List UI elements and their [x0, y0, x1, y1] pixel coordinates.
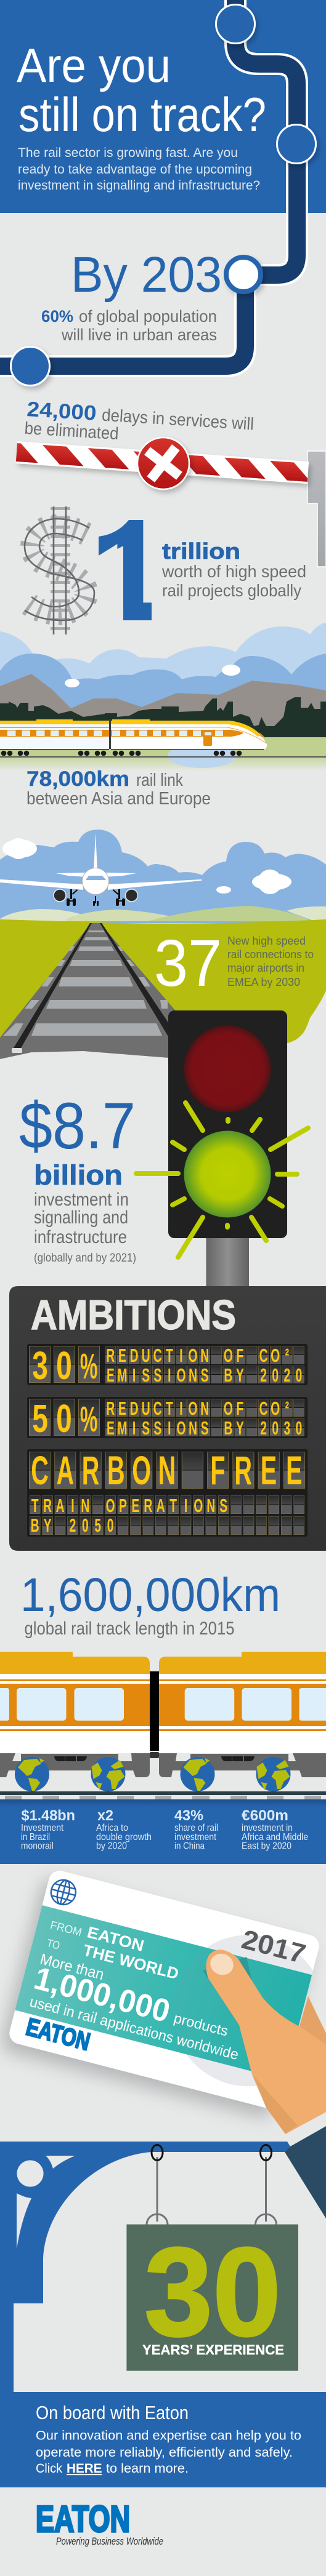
- rail: [0, 1791, 326, 1795]
- text: products count: [26, 1950, 251, 2063]
- olive field: [0, 919, 326, 1046]
- stat: middle east: Africa and Middle: [242, 1832, 308, 1842]
- board row: carbon free: CARBON FREE: [31, 1448, 303, 1494]
- heading: by 2030: By 203: [71, 247, 222, 303]
- icon: globe wheel: [91, 1757, 126, 1791]
- trillion text: [161, 538, 306, 600]
- rail link text: 78,000km: [26, 767, 129, 791]
- icon: hand holding card: [206, 1950, 326, 2134]
- coupling: [150, 1671, 159, 1758]
- stat: africa: x2: [97, 1807, 113, 1824]
- stat: middle east: [242, 1807, 308, 1851]
- icon: dollar sign made of rail tracks: [25, 506, 94, 634]
- stat: brazil: monorail: [21, 1841, 54, 1851]
- text: 8.7 billion investment: investment in: [34, 1190, 129, 1210]
- icon: level crossing barrier: [16, 435, 309, 492]
- panel: blue frame with track arch: [0, 2142, 326, 2487]
- left carriage: [0, 1652, 150, 1777]
- board row: 50 percent: 50: [32, 1397, 72, 1441]
- delays text: 24,000: [26, 398, 97, 425]
- on board text: HERE: [67, 2461, 102, 2476]
- traffic light: [136, 1010, 308, 1257]
- card shadow: [0, 1877, 314, 2119]
- text: 37 airports: major airports in: [227, 961, 304, 974]
- logo: eaton on card: EATON: [23, 2014, 93, 2056]
- board row: carbon free: TRAIN OPERATIONS: [31, 1496, 227, 1516]
- title: Are you: [17, 38, 171, 92]
- delays text: [24, 398, 255, 451]
- header panel: [0, 0, 326, 213]
- stat: china: investment: [174, 1832, 216, 1842]
- sign: 30 years experience: 30: [144, 2222, 281, 2362]
- logo: eaton footer: EATON: [36, 2498, 130, 2540]
- text: 37 airports: EMEA by 2030: [227, 975, 300, 988]
- on board text: Click: [36, 2461, 62, 2476]
- urban population text: will live in urban areas: [61, 326, 217, 344]
- panel: rail ticket card: [7, 1868, 326, 2116]
- stat: africa: Africa to: [96, 1823, 128, 1833]
- icon: globe wheel: [180, 1757, 214, 1791]
- text: 8.7 billion investment: signalling and: [34, 1207, 128, 1228]
- text: products count: 1,000,000: [30, 1961, 174, 2030]
- trillion text: rail projects globally: [162, 581, 301, 600]
- on board text: to learn more.: [106, 2461, 189, 2476]
- text: from eaton to the world: TO: [46, 1937, 61, 1952]
- panel: ambitions departure board: [9, 1286, 326, 1551]
- board row: 50 percent: %: [80, 1399, 97, 1439]
- stat: africa: double growth: [96, 1832, 152, 1842]
- stat: china: in China: [174, 1841, 205, 1851]
- landscape scene with high speed train: [0, 623, 326, 771]
- icon: globe: [48, 1878, 78, 1907]
- stat: middle east: East by 2020: [242, 1841, 291, 1851]
- text: products count: More than: [38, 1951, 106, 1983]
- board row: 50 percent: [27, 1397, 308, 1441]
- stat: middle east: investment in: [242, 1823, 293, 1833]
- icon: aeroplane: [0, 833, 202, 906]
- sky panel with clouds: [0, 830, 326, 923]
- text: 8.7 billion investment: billion: [34, 1159, 123, 1191]
- icon: barrier post: [308, 451, 326, 567]
- rail link text: between Asia and Europe: [26, 789, 211, 809]
- heading: ambitions: AMBITIONS: [31, 1292, 236, 1338]
- rail link text: [26, 767, 211, 809]
- sign: 30 years experience: YEARS’ EXPERIENCE: [142, 2342, 284, 2358]
- urban population text: of global population: [79, 307, 217, 326]
- board row: 50 percent: EMISSIONS BY 2030: [107, 1418, 302, 1439]
- board row: 30 percent: EMISSIONS BY 2020: [107, 1366, 302, 1386]
- text: 8.7 billion investment: (globally and by 2021): [34, 1252, 136, 1265]
- trillion text: worth of high speed: [161, 562, 306, 581]
- text: track length: global rail track length in 2015: [25, 1618, 234, 1639]
- text: 37 airports: 37: [154, 926, 222, 1000]
- board row: 30 percent: REDUCTION OF CO²: [106, 1346, 289, 1366]
- intro text: ready to take advantage of the upcoming: [18, 162, 252, 177]
- hanging sign chains: [147, 2145, 276, 2225]
- large train with globe wheels: [0, 1652, 326, 1799]
- delays text: be eliminated: [24, 418, 119, 443]
- board row: carbon free: BY 2050: [31, 1516, 113, 1536]
- text: 37 airports: New high speed: [227, 934, 306, 947]
- stat: brazil: in Brazil: [21, 1832, 50, 1842]
- title: still on track?: [18, 87, 266, 142]
- rail link text: rail link: [136, 770, 183, 790]
- text: 8.7 billion investment: $8.7: [19, 1089, 136, 1162]
- text: products count: products: [172, 2010, 230, 2039]
- board row: 50 percent: REDUCTION OF CO²: [106, 1399, 289, 1419]
- panel: investment statistics: [0, 1799, 326, 1864]
- bracket cutouts: [17, 2156, 75, 2249]
- text: track length: 1,600,000km: [20, 1569, 280, 1622]
- stat: china: share of rail: [174, 1823, 218, 1833]
- right carriage: [159, 1652, 326, 1777]
- thumb shadow: [203, 1957, 271, 2068]
- text: year: 2017: [238, 1924, 309, 1970]
- text: from eaton to the world: FROM: [49, 1919, 83, 1938]
- delays text: delays in services will: [101, 405, 255, 434]
- sleeve: [285, 2126, 326, 2218]
- sleepers: [5, 1796, 321, 1799]
- urban population text: 60%: [41, 307, 73, 326]
- board row: 30 percent: [27, 1344, 308, 1388]
- on board text: operate more reliably, efficiently and safely.: [36, 2445, 293, 2460]
- intro text: [18, 146, 260, 193]
- board row: carbon free: [27, 1448, 308, 1537]
- stat: africa: [96, 1807, 152, 1851]
- urban population text: [41, 307, 217, 344]
- railway track perspective: [0, 923, 185, 1059]
- stat: china: 43%: [174, 1807, 203, 1824]
- text: 37 airports: rail connections to: [227, 948, 314, 961]
- text: from eaton to the world: [44, 1913, 185, 1983]
- logo: eaton footer: Powering Business Worldwide: [56, 2535, 163, 2547]
- stat: brazil: [21, 1807, 75, 1851]
- text: 8.7 billion investment: [19, 1089, 136, 1265]
- on board text: [36, 2402, 301, 2476]
- stat: brazil: Investment: [21, 1823, 63, 1833]
- text: 37 airports: [154, 926, 314, 1000]
- board row: 30 percent: %: [80, 1346, 97, 1386]
- metro track line with stations: [0, 0, 316, 385]
- traffic light pole: [206, 1237, 249, 1289]
- text: from eaton to the world: THE WORLD: [81, 1941, 181, 1983]
- intro text: investment in signalling and infrastructure?: [18, 178, 260, 193]
- on board text: On board with Eaton: [36, 2402, 189, 2423]
- stat: brazil: $1.48bn: [21, 1807, 75, 1824]
- stat: africa: by 2020: [96, 1841, 127, 1851]
- trillion text: trillion: [162, 538, 240, 564]
- text: from eaton to the world: EATON: [85, 1922, 146, 1955]
- big number one: 1: [87, 491, 167, 651]
- station circle as zero of 2030: [226, 257, 261, 292]
- intro text: The rail sector is growing fast. Are you: [18, 146, 238, 160]
- stat: china: [174, 1807, 218, 1851]
- title: [17, 38, 266, 142]
- icon: globe wheel: [256, 1757, 291, 1791]
- on board text: Our innovation and expertise can help you to: [36, 2428, 301, 2443]
- stat: middle east: €600m: [242, 1807, 288, 1824]
- text: products count: used in rail applications worldwide: [28, 1993, 240, 2063]
- train: [0, 719, 267, 756]
- board row: 30 percent: 30: [32, 1344, 72, 1388]
- text: 8.7 billion investment: infrastructure: [34, 1227, 127, 1247]
- icon: globe wheel: [15, 1757, 49, 1791]
